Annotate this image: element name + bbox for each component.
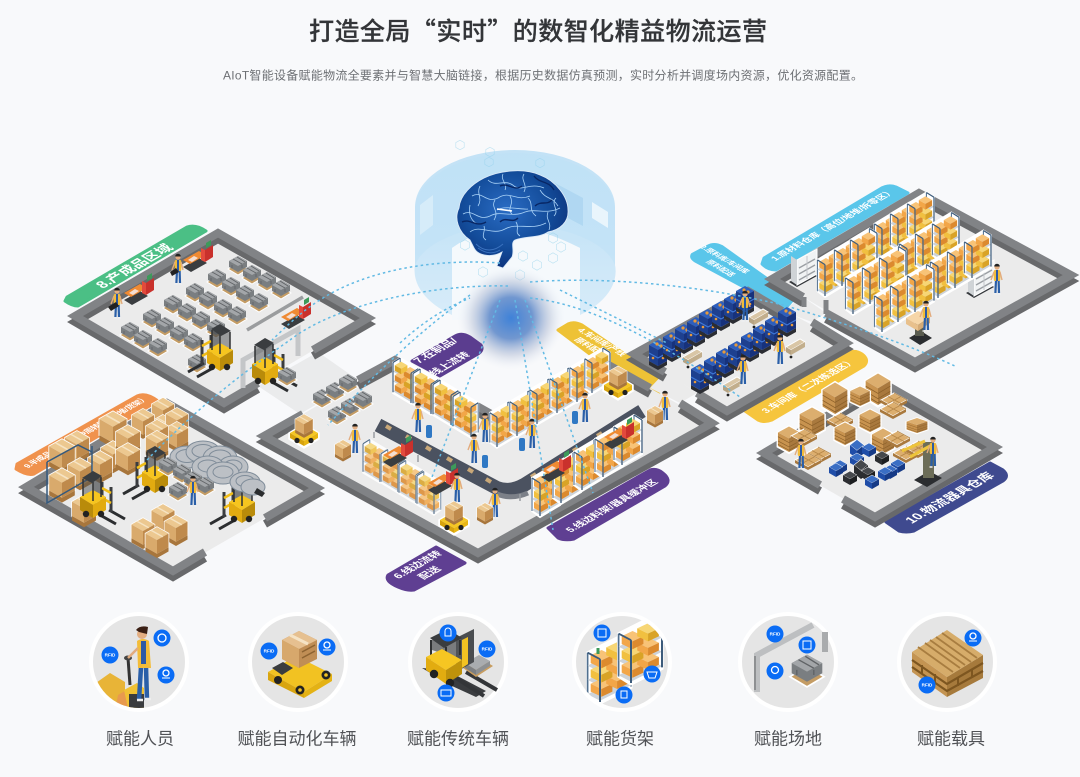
bottom crates bbox=[131, 504, 188, 558]
racks: lower-right row bbox=[532, 415, 642, 517]
data glow bbox=[457, 266, 565, 370]
AGV carts bbox=[289, 366, 633, 535]
floor and walls bbox=[772, 193, 1071, 368]
crates and rack bbox=[47, 398, 188, 503]
capability: empowered racks bbox=[576, 616, 668, 746]
warehouse 8: finished goods bbox=[75, 233, 368, 409]
label: 10 logistics equipment warehouse bbox=[886, 463, 1006, 532]
lift worker bbox=[906, 301, 932, 345]
label: 3 workshop warehouse: 3.车间库（二次拣选区） bbox=[759, 357, 859, 415]
black tires bbox=[254, 488, 265, 497]
floor and walls bbox=[75, 233, 368, 409]
blue racks: row two bbox=[691, 307, 796, 394]
workers bbox=[108, 254, 183, 318]
floor and walls bbox=[264, 360, 712, 559]
label: 8 finished goods: 8.产成品区域 bbox=[92, 242, 176, 290]
engine pallets bbox=[158, 457, 215, 501]
warehouse 1: raw material bbox=[772, 192, 1071, 368]
engine pallets bbox=[120, 256, 291, 357]
label: 7 work in progress: 7.在制品/ bbox=[409, 336, 461, 365]
conveyor bbox=[374, 411, 642, 501]
molecule pattern bbox=[456, 140, 566, 280]
label: 4 workshop to line: 原料配送 bbox=[572, 336, 611, 358]
blue racks: row one bbox=[649, 286, 754, 370]
blue and black bins bbox=[829, 439, 905, 489]
corridor floors bbox=[258, 297, 826, 414]
label: 3 workshop warehouse bbox=[745, 351, 867, 422]
caption: 赋能场地 bbox=[754, 730, 822, 748]
label: 5 line-side buffer: 5.线边料架/器具缓冲区 bbox=[562, 477, 661, 534]
icon: forklift: RFID bbox=[482, 647, 493, 652]
data connection lines bbox=[147, 262, 957, 530]
label: 4 workshop to line bbox=[558, 323, 660, 392]
icon: wooden pallets: RFID bbox=[922, 683, 933, 688]
warehouse 2-3: workshop bbox=[634, 286, 846, 417]
holographic cylinder bbox=[415, 150, 616, 320]
tall racks bbox=[817, 192, 991, 333]
steel coils bbox=[170, 441, 265, 495]
smart brain hologram bbox=[415, 140, 616, 370]
label: 7 work in progress: 线上流转 bbox=[426, 350, 474, 377]
label: 5 line-side buffer bbox=[548, 469, 668, 540]
workers bbox=[737, 291, 785, 385]
label: 2 warehouse to workshop bbox=[691, 243, 795, 310]
worker bbox=[795, 439, 806, 469]
icon: worker with pallet jack: RFID bbox=[105, 653, 116, 658]
caption: 赋能货架 bbox=[586, 730, 654, 748]
gate arch bbox=[243, 297, 303, 388]
label: 6 line-side delivery bbox=[387, 547, 465, 590]
forklifts bbox=[187, 324, 297, 391]
icon: AGV with crate: RFID bbox=[264, 649, 275, 654]
pallet stacker bbox=[902, 437, 942, 487]
capability: empowered site bbox=[738, 612, 838, 748]
label: 4 workshop to line: 4.车间库/产线 bbox=[575, 327, 629, 358]
icon: site gate: RFID bbox=[770, 632, 781, 637]
caption: 赋能载具 bbox=[917, 730, 985, 748]
forklifts bbox=[72, 446, 255, 529]
wooden pallet stacks bbox=[777, 372, 931, 470]
pallet jacks bbox=[335, 406, 663, 524]
worker bbox=[187, 476, 198, 506]
label: 1 raw material warehouse: 1.原材料仓库（高位/地堆/拆零区） bbox=[768, 187, 897, 262]
capability: empowered AGVs bbox=[238, 612, 356, 748]
racks: lower-left row bbox=[363, 440, 441, 515]
racks: back-right row bbox=[490, 348, 610, 448]
label: 8 finished goods bbox=[65, 226, 206, 306]
capability: empowered personnel bbox=[93, 616, 185, 746]
label: 7 work in progress bbox=[409, 334, 482, 377]
floor and walls bbox=[764, 383, 995, 523]
workstations bbox=[383, 417, 634, 495]
floor and walls bbox=[26, 403, 317, 577]
capability: empowered conventional vehicles bbox=[407, 612, 509, 748]
racks: back-left row bbox=[393, 358, 478, 438]
caption: 赋能人员 bbox=[106, 730, 174, 748]
label: 6 line-side delivery: 配送 bbox=[415, 564, 445, 581]
floor and walls bbox=[634, 291, 846, 417]
warehouse 9: semi-finished bbox=[26, 398, 317, 577]
corridor engine pallets bbox=[312, 374, 373, 425]
blue cylinders bbox=[426, 411, 578, 468]
label: 9 semi-finished: 9.半成品/半导体缓冲周转区（地堆/货架） bbox=[21, 395, 151, 469]
workers bbox=[349, 391, 670, 518]
caption: 赋能自动化车辆 bbox=[238, 730, 356, 748]
caption: 赋能传统车辆 bbox=[407, 730, 509, 748]
picker bbox=[991, 264, 1002, 294]
warehouse 10: logistics equipment bbox=[764, 372, 995, 523]
label: 2 warehouse to workshop: 2.原料库/车间库 bbox=[697, 243, 753, 275]
capability: empowered carriers bbox=[897, 612, 997, 748]
subtitle: AIoT智能设备赋能物流全要素并与智慧大脑链接，根据历史数据仿真预测，实时分析并调度场内资源，优化资源配置。 bbox=[223, 68, 863, 82]
warehouse 5-7: central production floor bbox=[264, 348, 712, 559]
workstations bbox=[124, 240, 311, 329]
title: 打造全局“实时”的数智化精益物流运营 bbox=[309, 12, 767, 48]
icon: rack bbox=[576, 616, 668, 708]
label: 6 line-side delivery: 6.线边流转 bbox=[390, 549, 446, 581]
carts bbox=[683, 309, 805, 396]
white shelves bbox=[789, 249, 994, 298]
label: 10 logistics equipment warehouse: 10.物流器具仓库 bbox=[901, 470, 998, 525]
brain bbox=[457, 171, 568, 268]
label: 2 warehouse to workshop: 原料配送 bbox=[704, 258, 739, 278]
